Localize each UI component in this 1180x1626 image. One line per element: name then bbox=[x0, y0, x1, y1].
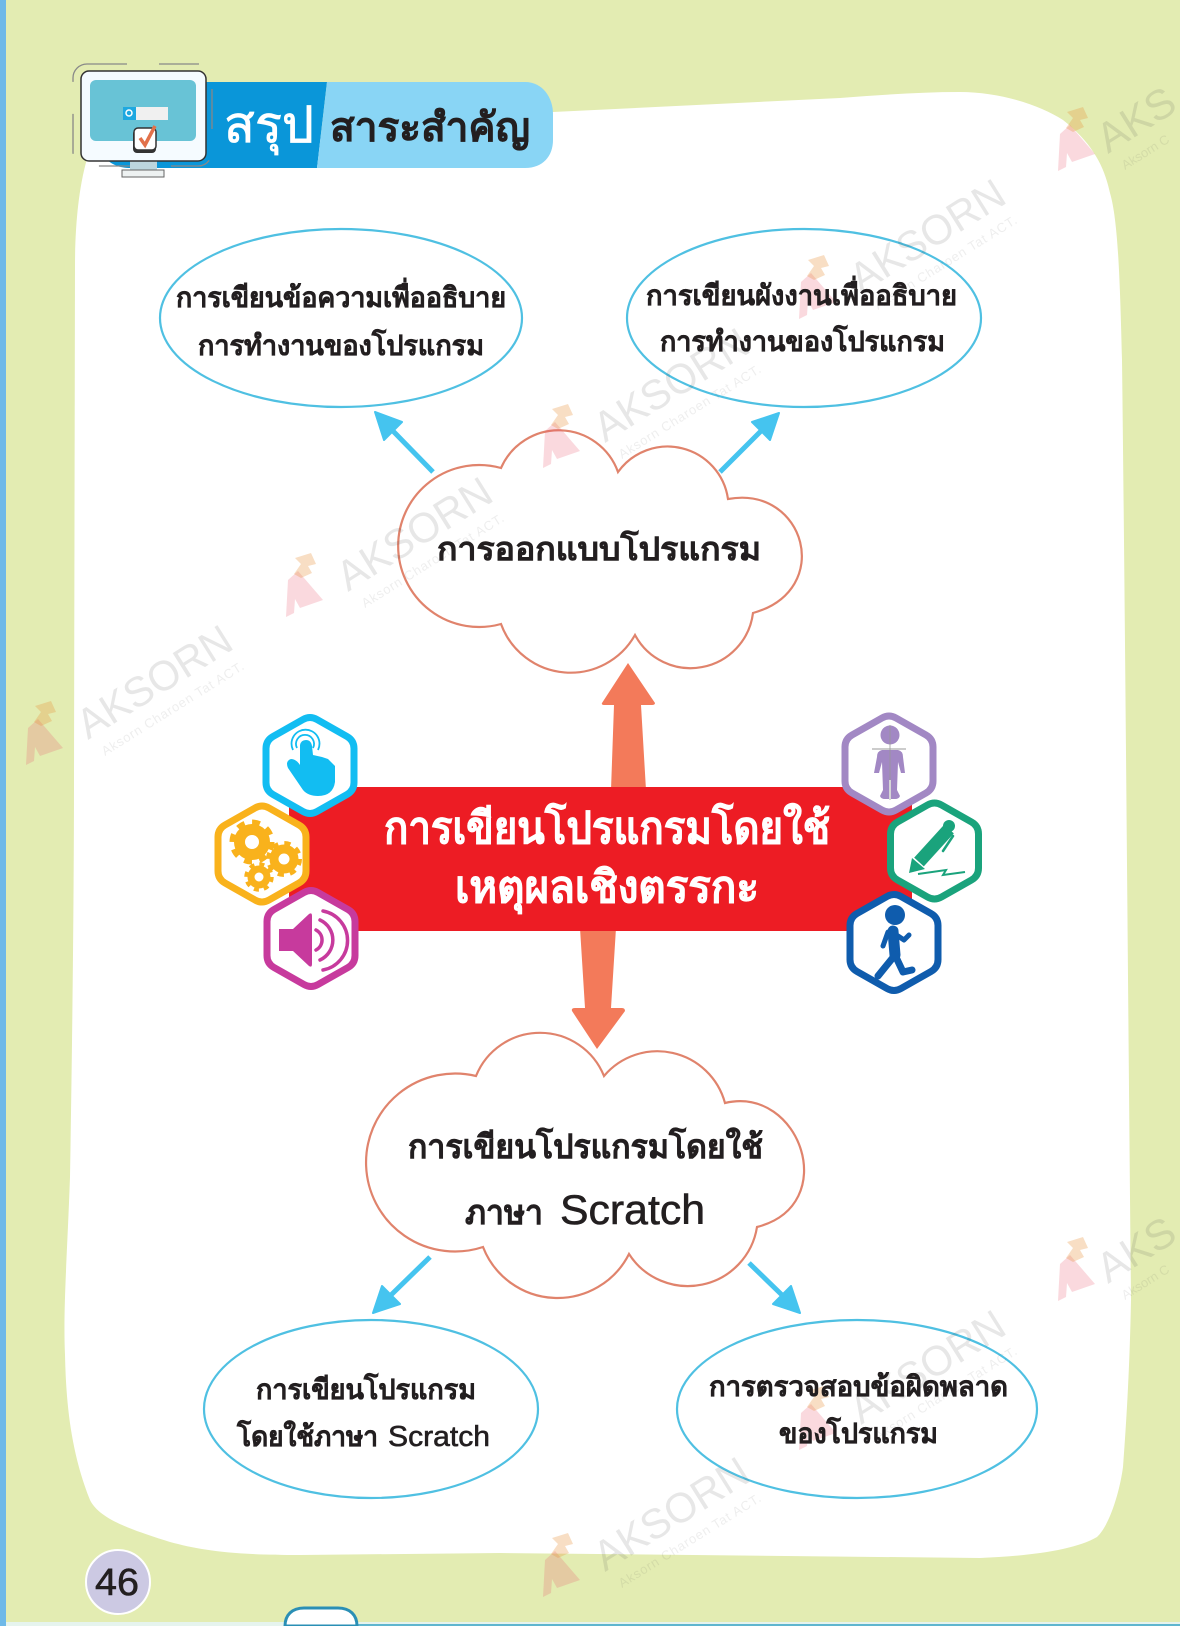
left edge blue strip bbox=[0, 0, 6, 1626]
watermark 1: Aksorn Charoen Tat ACT. bbox=[99, 658, 247, 759]
bottom blue line bbox=[358, 1624, 1180, 1626]
watermark 7: Aksorn Charoen Tat ACT. bbox=[872, 1343, 1020, 1444]
text: banner line 2: เหตุผลเชิงตรรกะ bbox=[455, 863, 759, 915]
text: bottom left ellipse line 1: การเขียนโปรแกรม bbox=[256, 1372, 476, 1405]
watermark 6 bbox=[1058, 1207, 1180, 1303]
icon: pen hexagon bbox=[890, 803, 978, 899]
icon: computer with checkbox bbox=[73, 64, 212, 177]
watermark 3: AKSORN bbox=[585, 319, 757, 451]
watermark 4: AKSORN bbox=[841, 170, 1013, 302]
watermark 1 bbox=[26, 616, 247, 765]
text: top right ellipse line 1: การเขียนผังงานเพื่ออธิบาย bbox=[646, 275, 957, 311]
watermark 2 bbox=[286, 468, 507, 617]
watermark 2: Aksorn Charoen Tat ACT. bbox=[359, 510, 507, 611]
watermark 5 bbox=[1058, 77, 1180, 173]
watermark 8: AKSORN bbox=[585, 1448, 757, 1580]
header banner bbox=[100, 82, 553, 168]
watermark 1: AKSORN bbox=[68, 616, 240, 748]
text: top right ellipse line 2: การทำงานของโปรแกรม bbox=[660, 324, 945, 357]
text: top left ellipse line 2: การทำงานของโปรแกรม bbox=[198, 328, 484, 361]
text: bottom left ellipse line 2: โดยใช้ภาษา bbox=[236, 1419, 378, 1452]
text: Scratch cloud line 2: ภาษา bbox=[465, 1194, 543, 1232]
arrow: down to Scratch cloud bbox=[572, 928, 625, 1049]
bottom tab bbox=[285, 1608, 357, 1626]
text: design cloud: การออกแบบโปรแกรม bbox=[437, 530, 761, 567]
arrow: to bottom left ellipse bbox=[373, 1257, 430, 1313]
watermark 4 bbox=[799, 170, 1020, 319]
text: top left ellipse line 1: การเขียนข้อความเพื่ออธิบาย bbox=[176, 277, 506, 313]
text: Scratch cloud line 2 bbox=[465, 1186, 705, 1233]
cloud: program design bbox=[398, 430, 802, 673]
text: bottom left ellipse line 2 bbox=[236, 1419, 490, 1453]
watermark 7 bbox=[799, 1301, 1020, 1450]
icon: touch hand hexagon bbox=[266, 718, 354, 814]
icon: walking person hexagon bbox=[850, 894, 938, 990]
watermark 8 bbox=[543, 1448, 764, 1597]
header banner: สรุป bbox=[224, 97, 314, 155]
text: Scratch cloud line 1: การเขียนโปรแกรมโดยใช้ bbox=[408, 1127, 763, 1165]
bottom light strip bbox=[6, 1622, 1180, 1626]
page number bbox=[86, 1550, 150, 1614]
ellipse: bottom left bbox=[204, 1320, 538, 1498]
icon: gears hexagon bbox=[218, 806, 306, 902]
watermark 4: Aksorn Charoen Tat ACT. bbox=[872, 212, 1020, 313]
watermark 7: AKSORN bbox=[841, 1301, 1013, 1433]
icon: human figure hexagon bbox=[845, 716, 933, 812]
arrow: to top right ellipse bbox=[720, 413, 779, 472]
watermark 3 bbox=[543, 319, 764, 468]
header banner: สาระสำคัญ bbox=[330, 106, 530, 151]
watermark 5: Aksorn C bbox=[1119, 131, 1172, 173]
arrow: to bottom right ellipse bbox=[749, 1263, 800, 1313]
watermark 8: Aksorn Charoen Tat ACT. bbox=[616, 1490, 764, 1591]
watermark 6: Aksorn C bbox=[1119, 1261, 1172, 1303]
icon: speaker hexagon bbox=[267, 890, 355, 986]
text: banner line 1: การเขียนโปรแกรมโดยใช้ bbox=[384, 801, 830, 853]
watermark 3: Aksorn Charoen Tat ACT. bbox=[616, 361, 764, 462]
text: Scratch cloud line 2: Scratch bbox=[560, 1186, 705, 1233]
central red banner bbox=[289, 787, 912, 931]
ellipse: bottom right bbox=[677, 1320, 1037, 1498]
text: bottom right ellipse line 2: ของโปรแกรม bbox=[779, 1416, 938, 1449]
page number: 46 bbox=[95, 1562, 139, 1604]
arrow: up to design cloud bbox=[602, 663, 655, 790]
cloud: Scratch programming bbox=[366, 1033, 804, 1298]
text: bottom left ellipse line 2: Scratch bbox=[388, 1421, 490, 1453]
ellipse: top right bbox=[627, 229, 981, 407]
text: bottom right ellipse line 1: การตรวจสอบข้อผิดพลาด bbox=[709, 1371, 1008, 1402]
watermark 2: AKSORN bbox=[328, 468, 500, 600]
arrow: to top left ellipse bbox=[375, 412, 433, 472]
ellipse: top left bbox=[160, 229, 522, 407]
